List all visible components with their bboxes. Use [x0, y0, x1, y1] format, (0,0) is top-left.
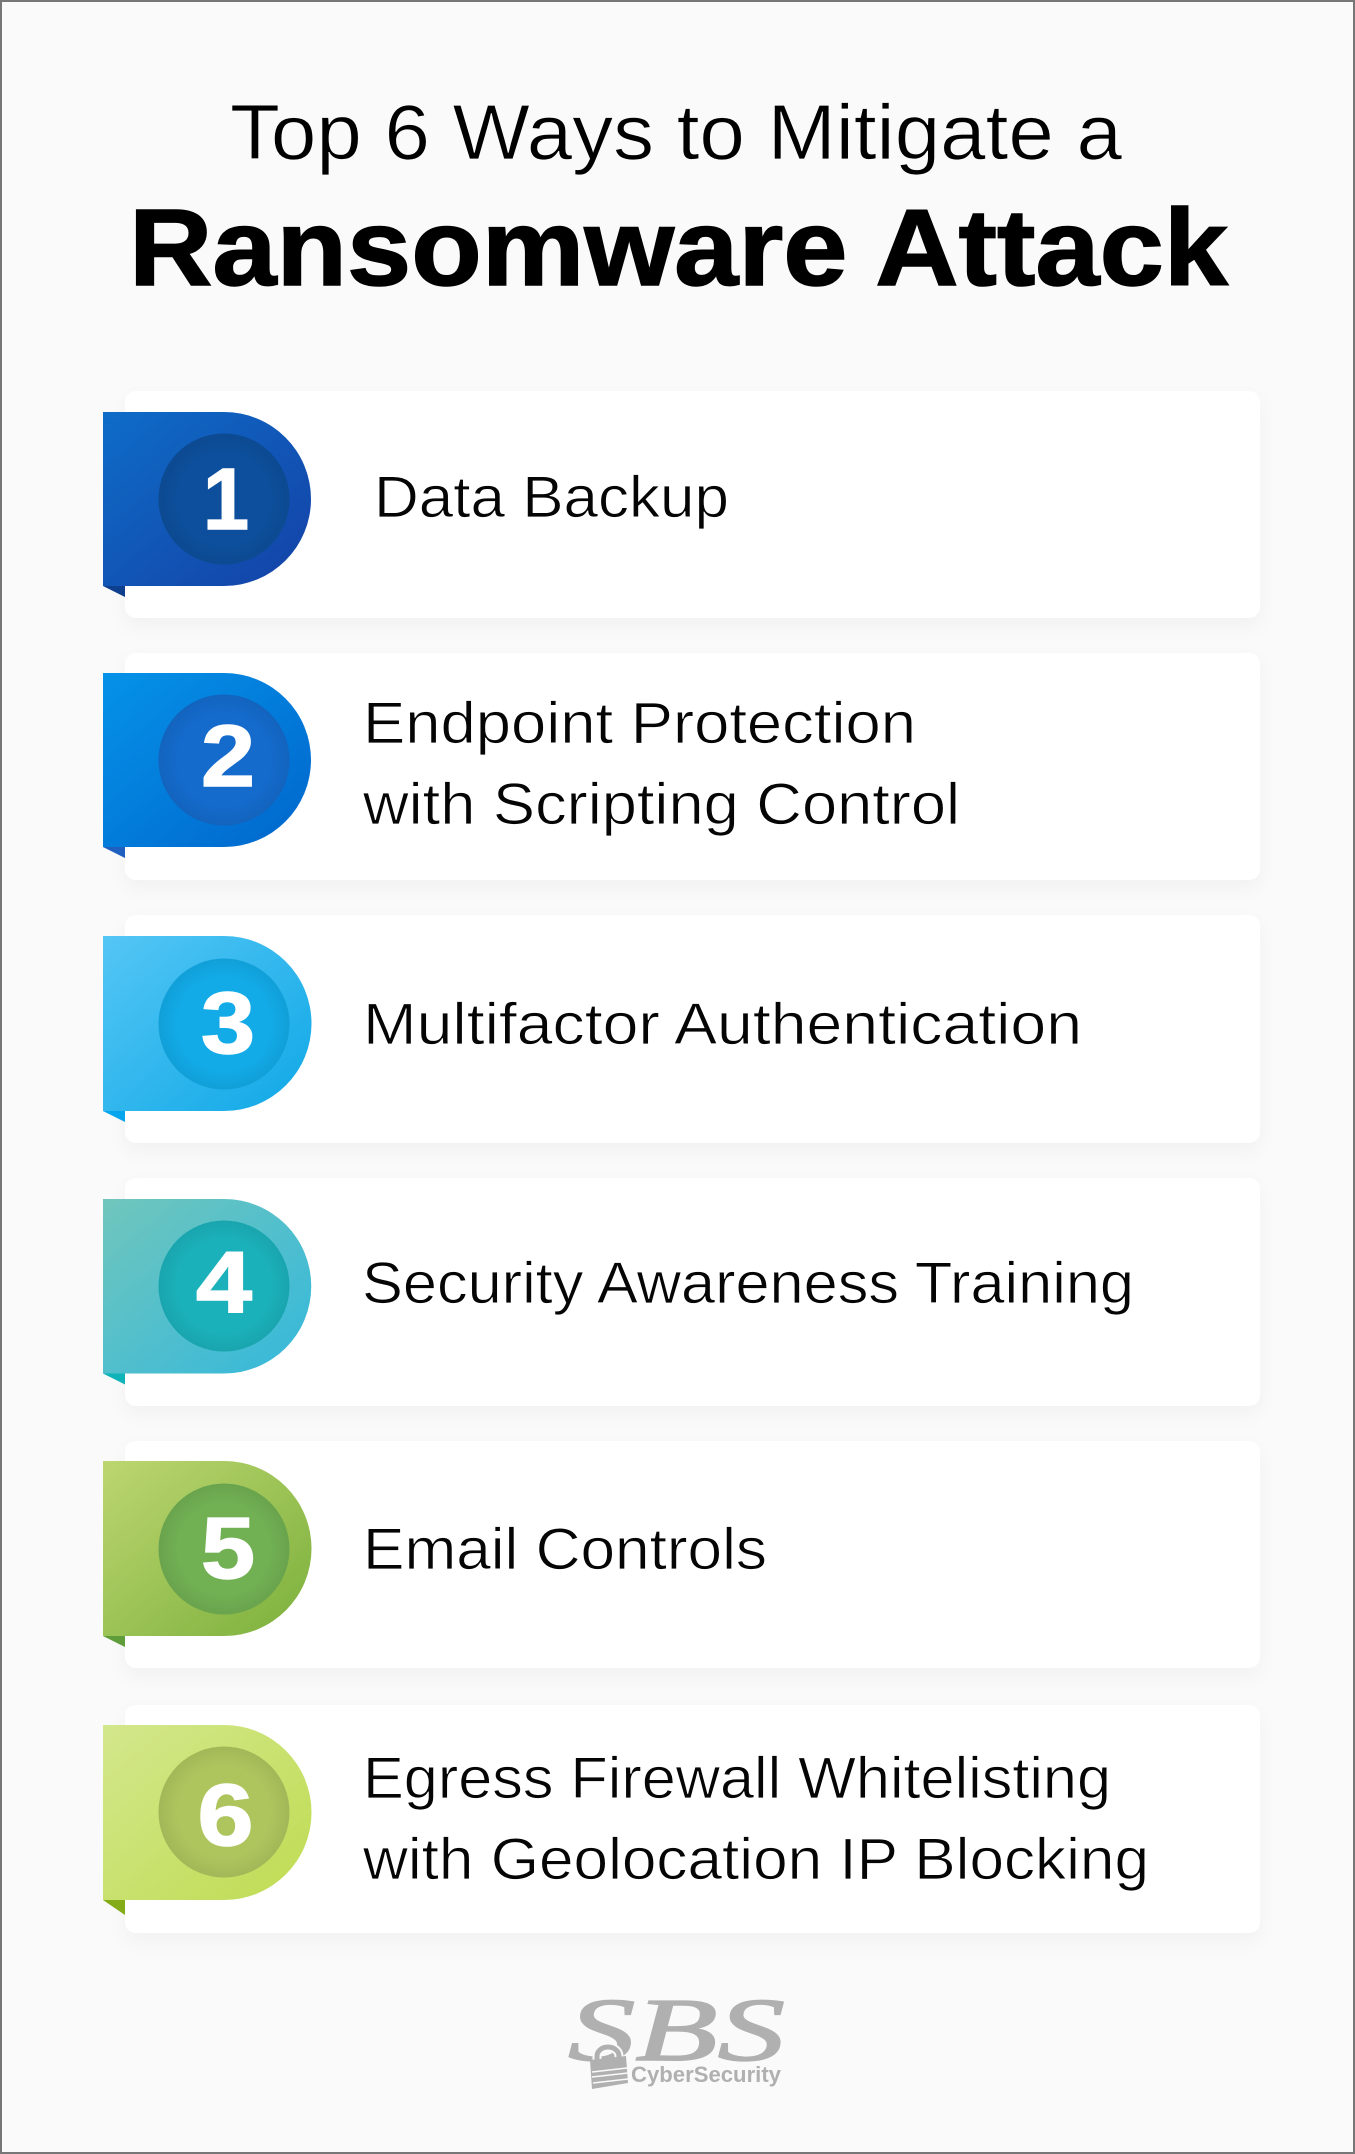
- panel: step 6 Egress Firewall Whitelisting: [103, 1705, 1260, 1933]
- label 2: Endpoint Protection: [363, 691, 916, 756]
- panel: step 2 Endpoint Protection: [103, 653, 1260, 880]
- logo: SBS CyberSecurity: [568, 1981, 785, 2089]
- panel: step 1 Data Backup: [103, 391, 1260, 618]
- number circle 2: [158, 694, 290, 826]
- label 2: [362, 691, 960, 837]
- number circle 4: [158, 1220, 290, 1352]
- number circle 1: [158, 434, 290, 564]
- number circle 6: [158, 1746, 290, 1878]
- number 2: 2: [201, 708, 255, 805]
- number banner 2: [103, 673, 311, 847]
- label 2: with Scripting Control: [362, 772, 960, 837]
- ribbon tail 6: [103, 1900, 125, 1915]
- label 3: Multifactor Authentication: [363, 992, 1082, 1057]
- panel: step 5 Email Controls: [103, 1441, 1260, 1668]
- label 6: Egress Firewall Whitelisting: [363, 1746, 1111, 1811]
- ribbon tail 4: [103, 1374, 125, 1384]
- number banner 6: [103, 1725, 312, 1900]
- title: [129, 88, 1228, 309]
- icon: padlock: [590, 2047, 628, 2089]
- number 4: 4: [196, 1234, 252, 1331]
- number circle 3: [158, 958, 290, 1090]
- ribbon tail 3: [103, 1111, 125, 1122]
- ribbon tail 5: [103, 1636, 125, 1647]
- number 5: 5: [201, 1500, 255, 1597]
- label 5: Email Controls: [363, 1517, 767, 1582]
- label 1: Data Backup: [374, 465, 729, 530]
- label 4: Security Awareness Training: [362, 1251, 1134, 1316]
- number 3: 3: [201, 975, 255, 1072]
- title: Ransomware Attack: [129, 187, 1228, 309]
- number banner 3: [103, 936, 312, 1111]
- number banner 5: [103, 1461, 312, 1636]
- title: Top 6 Ways to Mitigate a: [230, 88, 1123, 176]
- label 6: with Geolocation IP Blocking: [362, 1827, 1149, 1892]
- number banner 4: [103, 1199, 311, 1374]
- number 1: 1: [203, 451, 249, 548]
- panel: step 3 Multifactor Authentication: [103, 915, 1260, 1143]
- logo subtitle: CyberSecurity: [631, 2062, 782, 2087]
- panel: step 4 Security Awareness Training: [103, 1178, 1260, 1406]
- number 6: 6: [198, 1767, 254, 1864]
- ribbon tail 2: [103, 847, 125, 858]
- logo wordmark: SBS: [568, 1981, 785, 2080]
- number banner 1: [103, 412, 311, 586]
- label 6: [362, 1746, 1149, 1892]
- ribbon tail 1: [103, 586, 125, 597]
- number circle 5: [158, 1484, 290, 1614]
